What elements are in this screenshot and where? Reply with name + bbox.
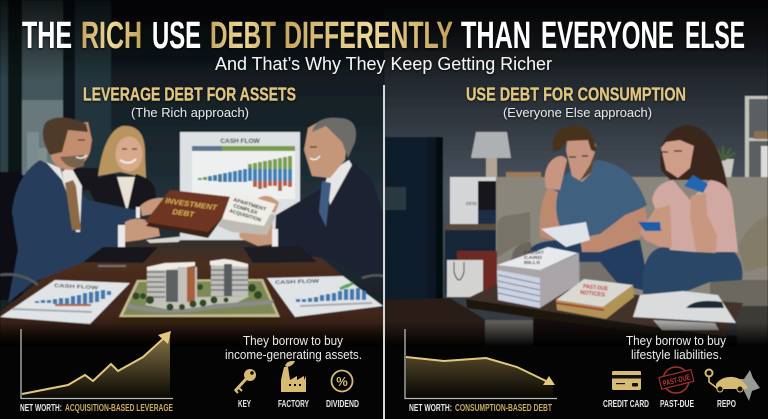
text: income-generating assets: income-generating assets. (225, 347, 362, 362)
title: THE (22, 15, 72, 57)
investment debt folder (145, 190, 232, 238)
title: THAN (461, 15, 531, 57)
label: past-due: PAST-DUE (660, 398, 694, 410)
black footer band (0, 346, 768, 419)
sofa (496, 177, 768, 346)
living room wall (384, 0, 768, 346)
right cash flow document (267, 276, 383, 317)
heading: leverage debt for assets: (The Rich approach) (131, 105, 249, 120)
shopping bags on side table: DESI (466, 201, 477, 206)
title: USE (152, 15, 201, 57)
table lamp (471, 132, 511, 177)
man with hand on head (530, 125, 650, 292)
left cash flow document: CASH FLOW (54, 283, 99, 291)
chart: rising net worth (21, 329, 173, 398)
apartment complex acquisition papers (218, 191, 276, 235)
heading: use debt for consumption (466, 84, 686, 120)
icon: dividend percent: % (336, 374, 348, 389)
heading: leverage debt for assets: LEVERAGE DEBT FOR ASSETS (83, 84, 296, 104)
icon: factory (281, 361, 306, 392)
text: income-generating assets (225, 333, 362, 362)
chair arms (0, 274, 384, 285)
conference table (0, 240, 384, 346)
woman with credit cards (640, 125, 742, 296)
icon: past-due stamp (659, 367, 694, 393)
chart caption: consumption-based debt (409, 402, 552, 414)
heading: use debt for consumption: USE DEBT FOR CONSUMPTION (466, 84, 686, 104)
car magazine (633, 291, 736, 330)
left cash flow document (0, 280, 130, 324)
cash flow board (180, 132, 300, 240)
icon: past-due stamp: PAST-DUE (662, 372, 692, 388)
title: EVERYONE (541, 15, 674, 57)
label: factory: FACTORY (278, 398, 309, 410)
chairs (0, 168, 98, 300)
label: repo: REPO (717, 398, 736, 410)
shopping bags on side table (445, 172, 541, 294)
subtitle: And That’s Why They Keep Getting Richer (215, 54, 552, 74)
shelf with plant (710, 96, 768, 180)
credit card bills stack: BILLS (524, 260, 540, 265)
icon: key (235, 369, 256, 393)
panel: the rich scene (0, 0, 384, 346)
heading: use debt for consumption: (Everyone Else approach) (503, 105, 652, 120)
text: income-generating assets: They borrow to buy (243, 333, 343, 348)
text: lifestyle liabilities: lifestyle liabilities. (631, 347, 722, 362)
chart: falling net worth (405, 329, 557, 398)
chart caption: consumption-based debt: NET WORTH: (409, 402, 452, 414)
investment debt folder: INVESTMENT (165, 196, 219, 212)
center divider (383, 85, 385, 419)
title: RICH (81, 15, 142, 57)
label: key: KEY (238, 398, 251, 410)
raised blue credit card (684, 175, 708, 193)
credit card bills stack: CARD (524, 255, 543, 260)
television (385, 137, 443, 327)
office wall (0, 0, 384, 346)
text: lifestyle liabilities (626, 333, 726, 362)
label: credit card: CREDIT CARD (603, 398, 649, 410)
title: DIFFERENTLY (284, 15, 453, 57)
title: DEBT (210, 15, 276, 57)
credit card bills stack: CREDIT (524, 250, 544, 255)
past-due notices stack (556, 279, 634, 319)
coffee table (466, 284, 743, 345)
past-due notices stack: NOTICES (580, 290, 605, 299)
icon: credit card (612, 371, 641, 390)
chart caption: consumption-based debt: CONSUMPTION-BASED DEBT (455, 402, 552, 414)
floor and rug (384, 298, 737, 346)
icon: dividend percent (332, 370, 352, 392)
apartment building model (119, 259, 280, 326)
bottom fade (0, 322, 768, 347)
investment debt folder: DEBT (172, 207, 196, 219)
title (22, 15, 745, 57)
right cash flow document: CASH FLOW (275, 278, 319, 286)
chart caption: acquisition-based leverage: ACQUISITION-BASED LEVERAGE (65, 402, 173, 414)
shopping bags on the floor (447, 251, 497, 297)
apartment complex acquisition papers: APARTMENT (232, 197, 267, 213)
text: lifestyle liabilities: They borrow to buy (626, 333, 726, 348)
chart caption: acquisition-based leverage (20, 402, 173, 414)
panel: everyone else scene (384, 0, 768, 346)
lower blue credit card (638, 222, 661, 231)
table folders (83, 236, 317, 267)
credit card bills stack (497, 247, 579, 308)
heading: leverage debt for assets (83, 84, 296, 120)
chart caption: acquisition-based leverage: NET WORTH: (20, 402, 62, 414)
office window (0, 0, 111, 175)
icon: repo car with chain (706, 370, 760, 401)
past-due notices stack: PAST-DUE (583, 284, 608, 293)
top darkening (0, 0, 768, 80)
cash flow board: CASH FLOW (220, 138, 261, 145)
apartment complex acquisition papers: COMPLEX (232, 203, 259, 216)
man in blue suit (8, 117, 164, 303)
woman in black jacket (88, 126, 158, 222)
man in dark suit (239, 118, 384, 282)
man's paper (541, 222, 590, 247)
apartment complex acquisition papers: ACQUISITION (228, 208, 262, 224)
label: dividend: DIVIDEND (326, 398, 359, 410)
